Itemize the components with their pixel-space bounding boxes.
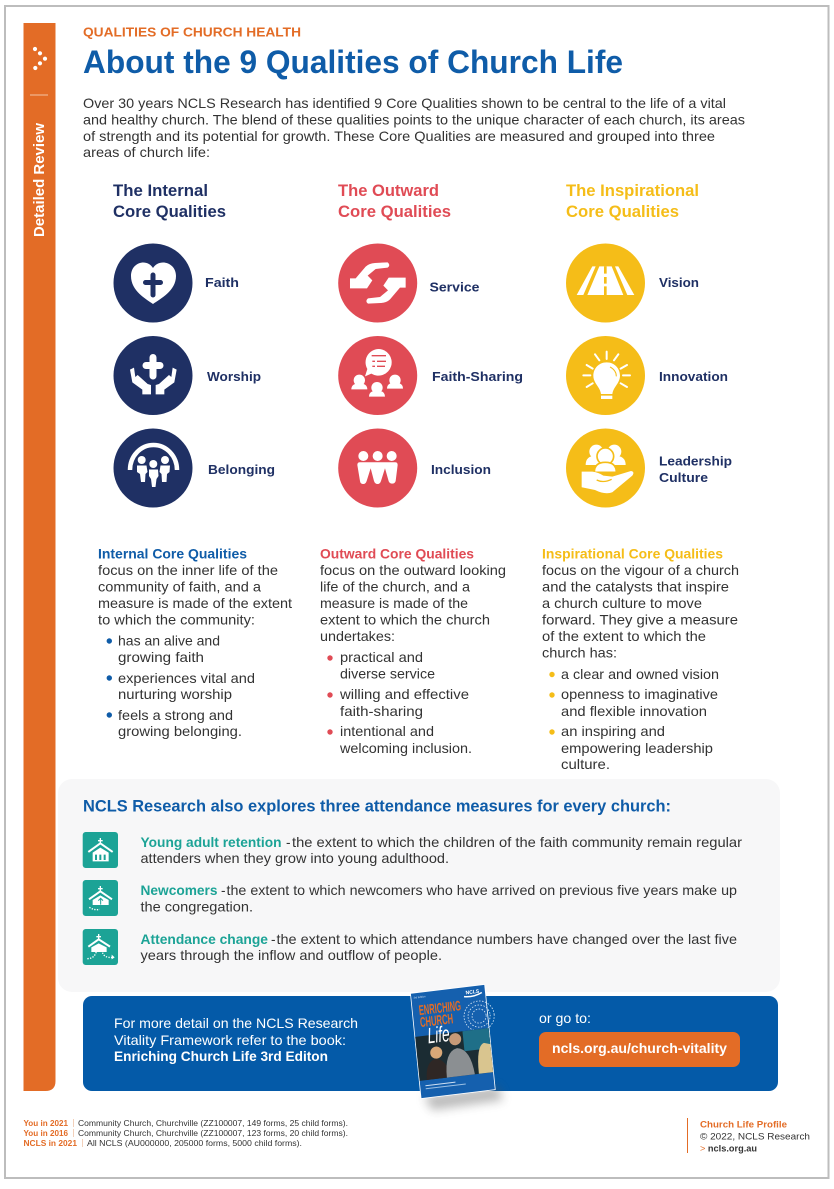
icon: Vision road <box>566 244 645 322</box>
footer: data sources: NCLS in 2021 <box>24 1139 78 1148</box>
text: young adult retention: attenders when they grow into young adulthood. <box>140 851 449 866</box>
heading: The Internal Core Qualities: Core Qualities <box>113 203 226 221</box>
text: young adult retention: Young adult retention <box>140 835 282 850</box>
icon: Inclusion group of people <box>338 428 417 508</box>
text block: Inspirational Core Qualities: openness to imaginative <box>561 687 718 702</box>
label: Worship: Worship <box>207 369 261 384</box>
text block: Inspirational Core Qualities: focus on the vigour of a church <box>542 563 739 578</box>
text: attendance change: Attendance change <box>140 932 268 947</box>
banner text: Vitality Framework refer to the book: <box>114 1033 346 1048</box>
footer: data sources: You in 2021 <box>24 1119 69 1128</box>
footer: credit: Church Life Profile <box>700 1120 787 1130</box>
icon: young adult retention church <box>83 832 118 868</box>
banner text: For more detail on the NCLS Research <box>114 1016 358 1031</box>
book cover: Enriching Church Life: NCLS <box>465 989 480 996</box>
book cover: Enriching Church Life: CHURCH <box>419 1010 454 1030</box>
text block: Internal Core Qualities <box>98 546 292 739</box>
icon: Worship hands with cross <box>114 336 192 415</box>
footer: credit <box>687 1118 810 1154</box>
text block: Inspirational Core Qualities <box>542 546 739 772</box>
icon: Service helping hands <box>338 244 417 322</box>
text block: Inspirational Core Qualities: and the catalysts that inspire <box>542 580 729 594</box>
footer: data sources: You in 2016 <box>24 1129 69 1138</box>
label: Service: Service <box>430 280 480 294</box>
text block: Inspirational Core Qualities: of the extent to which the <box>542 629 706 644</box>
label: Faith-Sharing: Faith-Sharing <box>432 369 523 384</box>
text block: Internal Core Qualities: has an alive and <box>118 634 220 648</box>
text block: Internal Core Qualities: Internal Core Qualities <box>98 546 247 562</box>
text block: Outward Core Qualities: willing and effective <box>339 687 469 702</box>
footer: data sources: All NCLS (AU000000, 205000 forms, 5000 child forms). <box>87 1139 302 1148</box>
heading: The Inspirational Core Qualities: The Inspirational <box>566 182 699 200</box>
text: attendance change: - <box>271 932 276 947</box>
text block: Outward Core Qualities: Outward Core Qualities <box>320 546 474 562</box>
text: newcomers: Newcomers <box>140 883 218 898</box>
text: attendance change <box>140 932 737 963</box>
text block: Internal Core Qualities: nurturing worship <box>118 687 232 702</box>
eyebrow heading: QUALITIES OF CHURCH HEALTH <box>83 24 301 40</box>
text: newcomers: the congregation. <box>140 900 253 914</box>
book cover: Enriching Church Life <box>410 983 503 1110</box>
footer: credit: > ncls.org.au <box>700 1144 757 1154</box>
icon: Faith heart with cross <box>114 244 192 322</box>
text block: Inspirational Core Qualities: Inspirational Core Qualities <box>542 546 723 562</box>
icon: Faith-Sharing speech bubble with people <box>338 336 417 415</box>
text block: Outward Core Qualities <box>320 546 506 756</box>
heading: The Inspirational Core Qualities <box>566 182 699 221</box>
text: young adult retention <box>140 835 742 866</box>
label: Leadership Culture: Leadership <box>659 454 732 468</box>
footer: credit: © 2022, NCLS Research <box>700 1132 810 1142</box>
text block: Internal Core Qualities: growing belonging. <box>118 724 242 739</box>
heading: The Internal Core Qualities: The Internal <box>113 182 208 200</box>
text block: Outward Core Qualities: life of the church, and a <box>320 580 470 594</box>
intro paragraph: Over 30 years NCLS Research has identified 9 Core Qualities shown to be central to the life of a vital <box>83 96 726 111</box>
button: link: ncls.org.au/church-vitality <box>552 1040 727 1056</box>
label: Leadership Culture: Culture <box>659 470 708 485</box>
text block: Inspirational Core Qualities: culture. <box>561 757 610 772</box>
text: newcomers <box>140 883 737 914</box>
icon: Leadership Culture hand holding people <box>566 428 645 508</box>
text block: Outward Core Qualities: focus on the outward looking <box>320 563 506 578</box>
panel heading: NCLS Research also explores three attendance measures for every church: <box>83 798 671 816</box>
text: attendance change: the extent to which attendance numbers have changed over the last five <box>276 932 737 947</box>
heading: The Inspirational Core Qualities: Core Qualities <box>566 203 679 221</box>
intro paragraph: of strength and its potential for growth. These Core Qualities are measured and grouped into three <box>83 129 715 144</box>
text block: Internal Core Qualities: experiences vital and <box>118 671 255 686</box>
text block: Internal Core Qualities: measure is made of the extent <box>98 596 292 611</box>
footer: data sources <box>24 1119 348 1148</box>
label: Faith: Faith <box>205 275 239 290</box>
label: Vision: Vision <box>659 275 699 290</box>
sidebar tab: Detailed Review <box>24 23 56 1091</box>
text block: Inspirational Core Qualities: forward. They give a measure <box>542 612 738 628</box>
text block: Outward Core Qualities: welcoming inclusion. <box>339 741 472 756</box>
text block: Inspirational Core Qualities: empowering leadership <box>561 741 713 756</box>
icon: newcomers church <box>83 880 118 916</box>
text block: Internal Core Qualities: to which the community: <box>98 612 255 628</box>
footer: data sources: Community Church, Churchville (ZZ100007, 123 forms, 20 child forms). <box>78 1129 348 1138</box>
heading: The Outward Core Qualities <box>338 182 451 221</box>
text: young adult retention: - <box>286 835 291 850</box>
book cover: Enriching Church Life: ENRICHING <box>418 997 462 1018</box>
text: or go to: or go to: <box>539 1011 591 1026</box>
text block: Outward Core Qualities: faith-sharing <box>340 704 423 719</box>
icon: Belonging arch with people <box>114 428 192 508</box>
footer: data sources: Community Church, Churchville (ZZ100007, 149 forms, 25 child forms). <box>78 1119 348 1128</box>
text block: Outward Core Qualities: extent to which the church <box>320 612 490 628</box>
icon: attendance change church <box>83 929 118 965</box>
book photo <box>415 1028 493 1081</box>
icon: Innovation light bulb <box>566 336 645 415</box>
panel: attendance measures <box>58 779 780 992</box>
label: Inclusion: Inclusion <box>431 462 491 477</box>
text block: Outward Core Qualities: measure is made of the <box>320 596 468 611</box>
text block: Outward Core Qualities: practical and <box>340 650 423 665</box>
text block: Inspirational Core Qualities: a clear and owned vision <box>561 667 719 682</box>
intro paragraph <box>83 96 745 160</box>
intro paragraph: areas of church life: <box>83 145 210 160</box>
panel: more detail banner <box>83 996 778 1091</box>
label: Belonging: Belonging <box>208 462 275 477</box>
label: Innovation: Innovation <box>659 369 728 384</box>
text: newcomers: the extent to which newcomers who have arrived on previous five years make up <box>226 883 737 898</box>
text block: Outward Core Qualities: diverse service <box>340 666 435 682</box>
text block: Outward Core Qualities: undertakes: <box>320 629 395 644</box>
intro paragraph: and healthy church. The blend of these qualities points to the unique character of each church, its areas <box>83 112 745 128</box>
heading: The Internal Core Qualities <box>113 182 226 221</box>
text block: Inspirational Core Qualities: church has: <box>542 646 617 660</box>
text: young adult retention: the extent to which the children of the faith community remain regular <box>292 835 742 850</box>
text block: Internal Core Qualities: focus on the inner life of the <box>98 563 278 578</box>
text block: Inspirational Core Qualities: a church culture to move <box>542 596 702 611</box>
book cover: Enriching Church Life: 3rd Edition <box>413 995 426 1000</box>
banner text: Enriching Church Life 3rd Editon <box>114 1049 328 1064</box>
icon: NCLS dots logo <box>33 47 47 70</box>
button: link <box>539 1032 740 1067</box>
book cover: Enriching Church Life: Life <box>426 1021 451 1048</box>
heading: The Outward Core Qualities: The Outward <box>338 182 439 200</box>
sidebar label: Detailed Review <box>32 122 48 237</box>
text: attendance change: years through the inflow and outflow of people. <box>140 948 442 963</box>
banner text <box>114 1016 358 1064</box>
text block: Internal Core Qualities: feels a strong and <box>118 708 233 723</box>
title: About the 9 Qualities of Church Life <box>83 44 623 80</box>
text block: Outward Core Qualities: intentional and <box>340 724 434 739</box>
heading: The Outward Core Qualities: Core Qualities <box>338 203 451 221</box>
text: newcomers: - <box>221 883 226 898</box>
text block: Internal Core Qualities: growing faith <box>118 650 204 665</box>
text block: Internal Core Qualities: community of faith, and a <box>98 580 261 594</box>
text block: Inspirational Core Qualities: an inspiring and <box>561 724 665 739</box>
text block: Inspirational Core Qualities: and flexible innovation <box>561 704 707 719</box>
label: Leadership Culture <box>659 454 732 485</box>
